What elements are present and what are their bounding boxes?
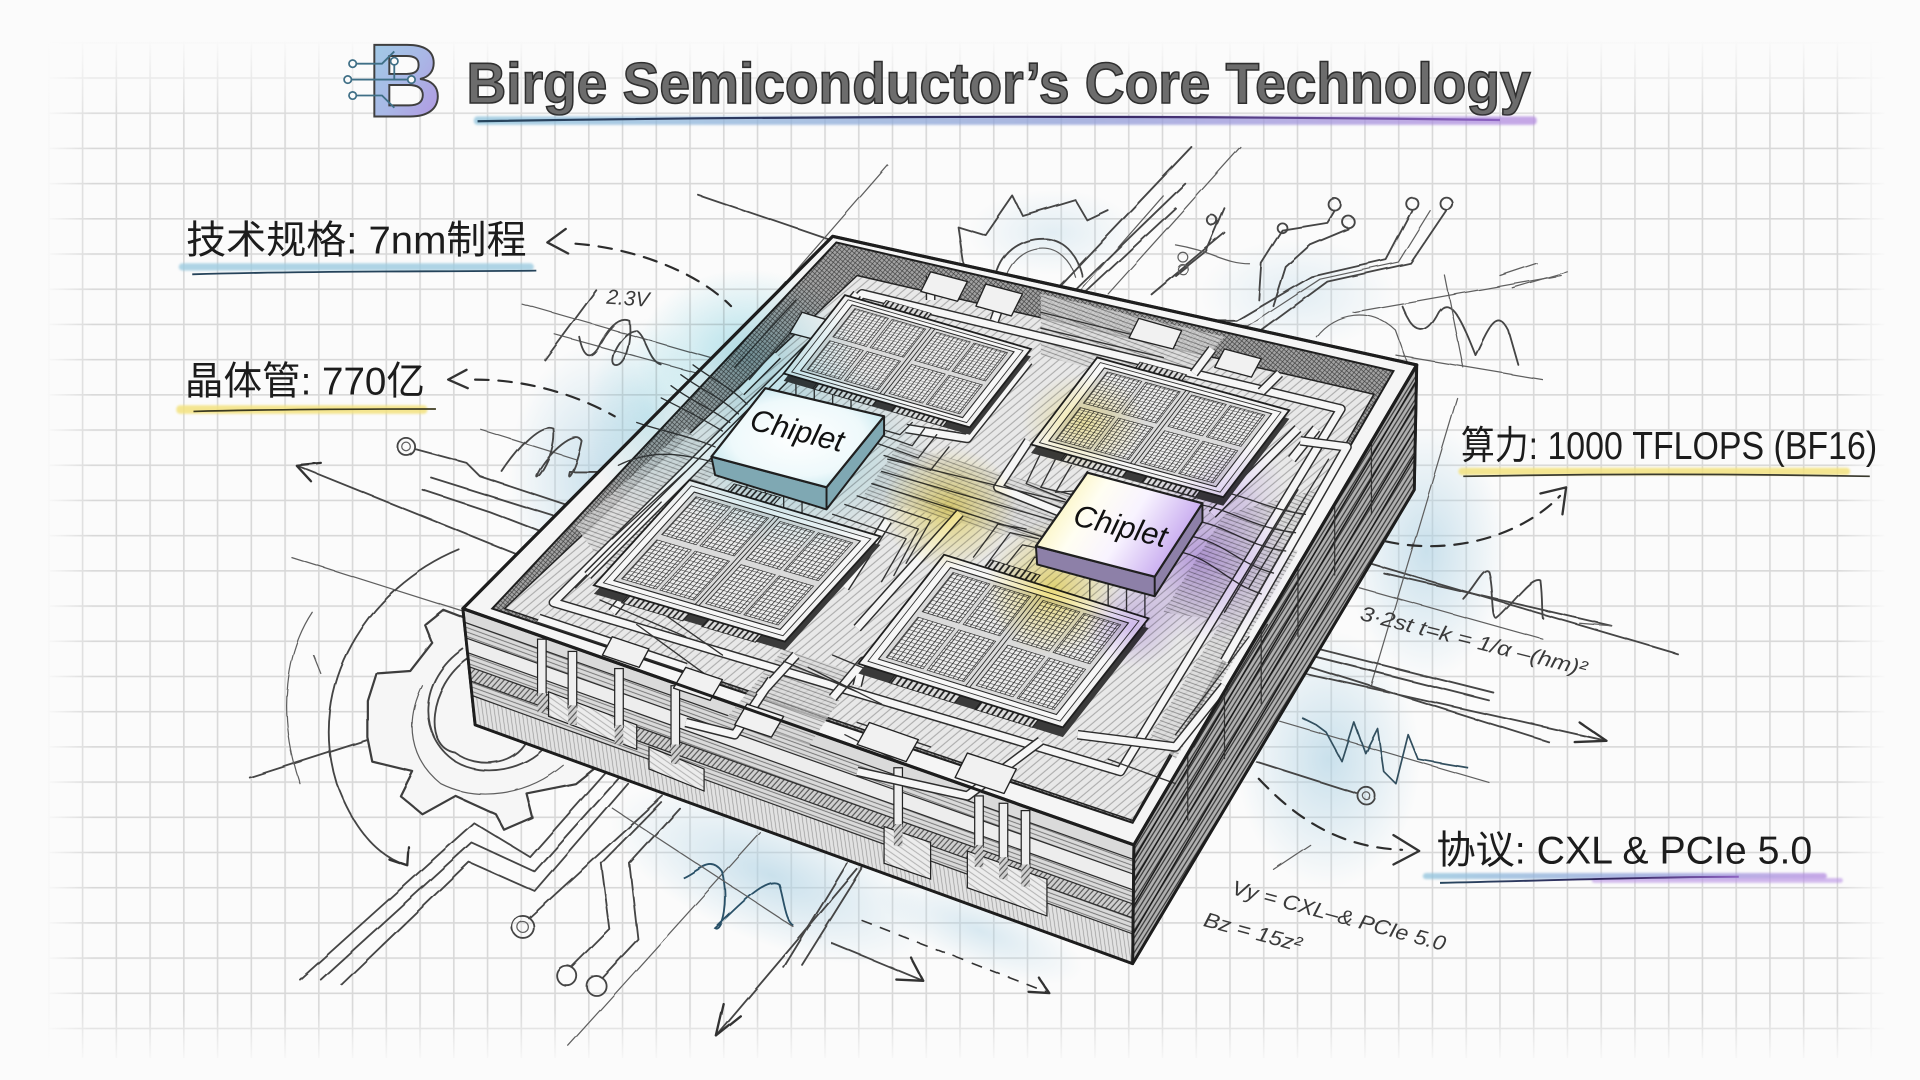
- sketch: left waveform 2.3V: [522, 290, 722, 373]
- formula: protocol equation: Vy = CXL–& PCIe 5.0: [1229, 876, 1449, 956]
- arrow: process callout: [547, 229, 731, 306]
- sketch: lower arrows: [831, 921, 1049, 993]
- arrow: compute callout: [1385, 487, 1566, 546]
- chip die: top: [779, 290, 1035, 435]
- formula: bandwidth equation: Bz = 15z²: [1201, 908, 1305, 957]
- callout: transistors: 晶体管: 770亿: [185, 360, 425, 403]
- chiplet 1 label: Chiplet: [747, 403, 849, 459]
- chip die: right: [1026, 351, 1294, 506]
- package inner wall: [492, 242, 1393, 823]
- package floor: [504, 276, 1374, 820]
- floor hatched patches: [576, 294, 1316, 759]
- sketch: top right wave and gear: [1316, 263, 1567, 380]
- package outer edges: [463, 236, 1417, 964]
- fine wiring fans: [576, 300, 1329, 784]
- chiplet block 1: [711, 388, 884, 509]
- title: Birge Semiconductor’s Core Technology: [467, 52, 1531, 116]
- title underline: [474, 116, 1537, 125]
- package top rim: [463, 236, 1417, 845]
- logo icon: B: [367, 23, 443, 139]
- callout: process: 技术规格: 7nm制程: [186, 219, 527, 262]
- sketch: long construction lines top: [698, 147, 1240, 355]
- sketch: right waveform and traces: [1256, 398, 1678, 869]
- floor connector blocks: [602, 272, 1261, 793]
- package right face: [1133, 365, 1417, 964]
- chiplet block 2: [1036, 473, 1202, 596]
- sketch: top gear: [958, 196, 1108, 284]
- sketch: top right circuit traces: [1176, 197, 1452, 331]
- sketch: left traces and arrow: [250, 428, 600, 866]
- formula: signal equation: 3·2st t=k = 1/α –(hm)²: [1358, 602, 1590, 681]
- package front vias left: [538, 639, 704, 791]
- formula: voltage note: 2.3V: [605, 286, 652, 312]
- callout: protocol: 协议: CXL & PCIe 5.0: [1436, 829, 1812, 872]
- colour glow over the package: [588, 269, 1292, 667]
- arrow: protocol callout: [1259, 779, 1419, 864]
- watercolor wash behind the package: [508, 190, 1506, 1006]
- sketch: large gear: [367, 610, 637, 830]
- floor traces: [539, 272, 1347, 796]
- sketch: lower blue waveform: [612, 808, 793, 929]
- package front face: [463, 609, 1134, 964]
- package front vias right: [884, 768, 1047, 916]
- chip die: bottom: [852, 547, 1155, 737]
- chip die: left: [587, 473, 887, 650]
- background circuit sketches: [250, 147, 1678, 1046]
- sketch: lower left circuit traces: [300, 771, 863, 1046]
- arrow: transistors callout: [448, 370, 615, 416]
- isometric chip package: [463, 236, 1417, 964]
- chiplet 2 label: Chiplet: [1070, 498, 1172, 555]
